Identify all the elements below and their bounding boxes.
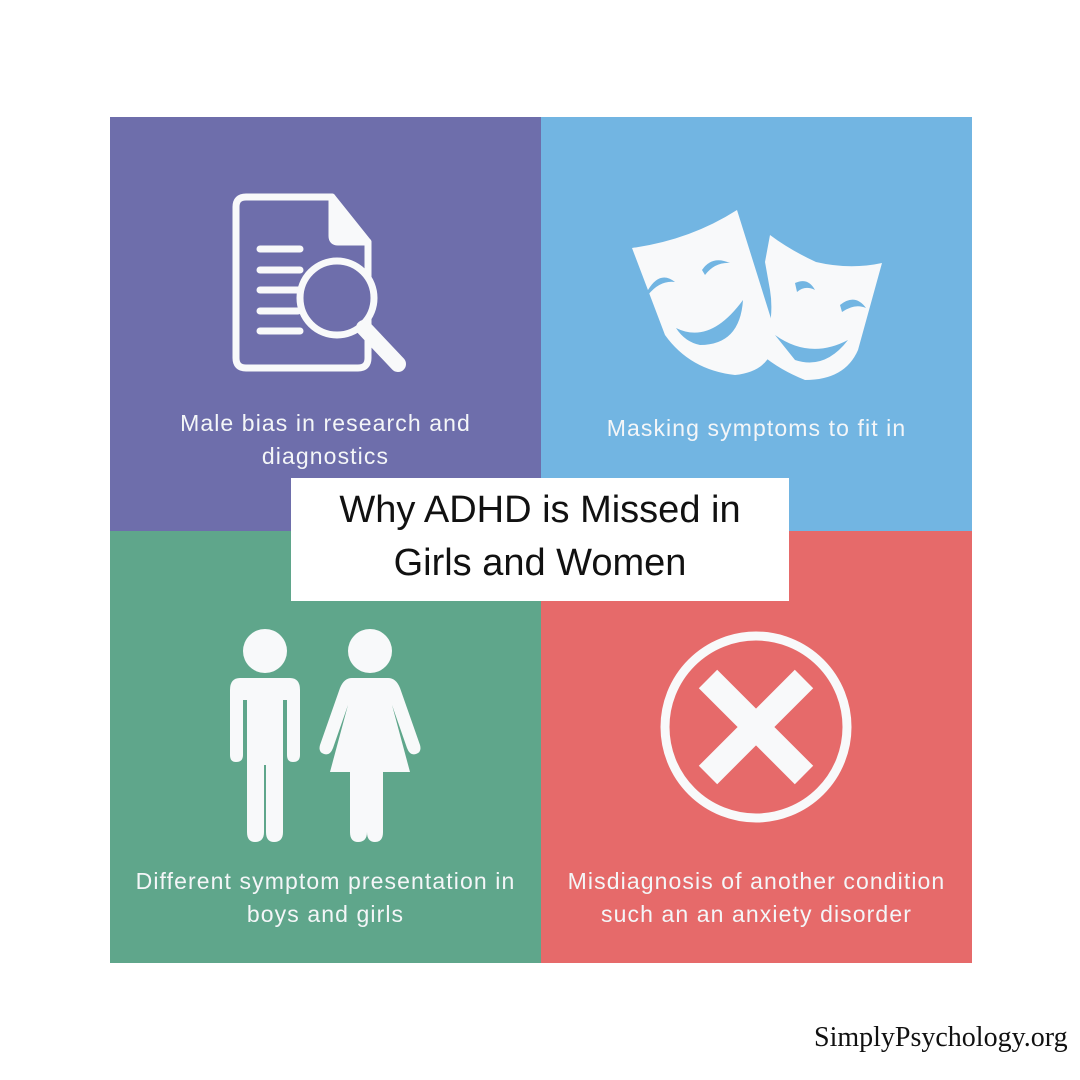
text: male bias [180, 410, 471, 469]
icon: document with magnifier [236, 197, 398, 368]
text: masking: Masking symptoms to fit in [607, 415, 906, 441]
title box [291, 478, 789, 601]
icon: X in circle [665, 636, 847, 818]
panel: misdiagnosis [541, 531, 972, 963]
watermark: SimplyPsychology.org [814, 1022, 1068, 1053]
text: male bias: diagnostics [262, 443, 389, 469]
panel: symptom presentation [110, 531, 541, 963]
text: different presentation [136, 868, 515, 927]
text: misdiagnosis [568, 868, 945, 927]
text: different presentation: Different symptom presentation in [136, 868, 515, 894]
icon: man and woman [230, 629, 420, 842]
text: misdiagnosis: Misdiagnosis of another condition [568, 868, 945, 894]
title box: Why ADHD is Missed in [339, 489, 741, 531]
text: different presentation: boys and girls [247, 901, 404, 927]
text: misdiagnosis: such an an anxiety disorder [601, 901, 912, 927]
text: male bias: Male bias in research and [180, 410, 471, 436]
title box: Girls and Women [394, 542, 686, 584]
panel: masking [541, 117, 972, 531]
icon: theatre masks [632, 210, 882, 380]
panel: male bias [110, 117, 541, 531]
